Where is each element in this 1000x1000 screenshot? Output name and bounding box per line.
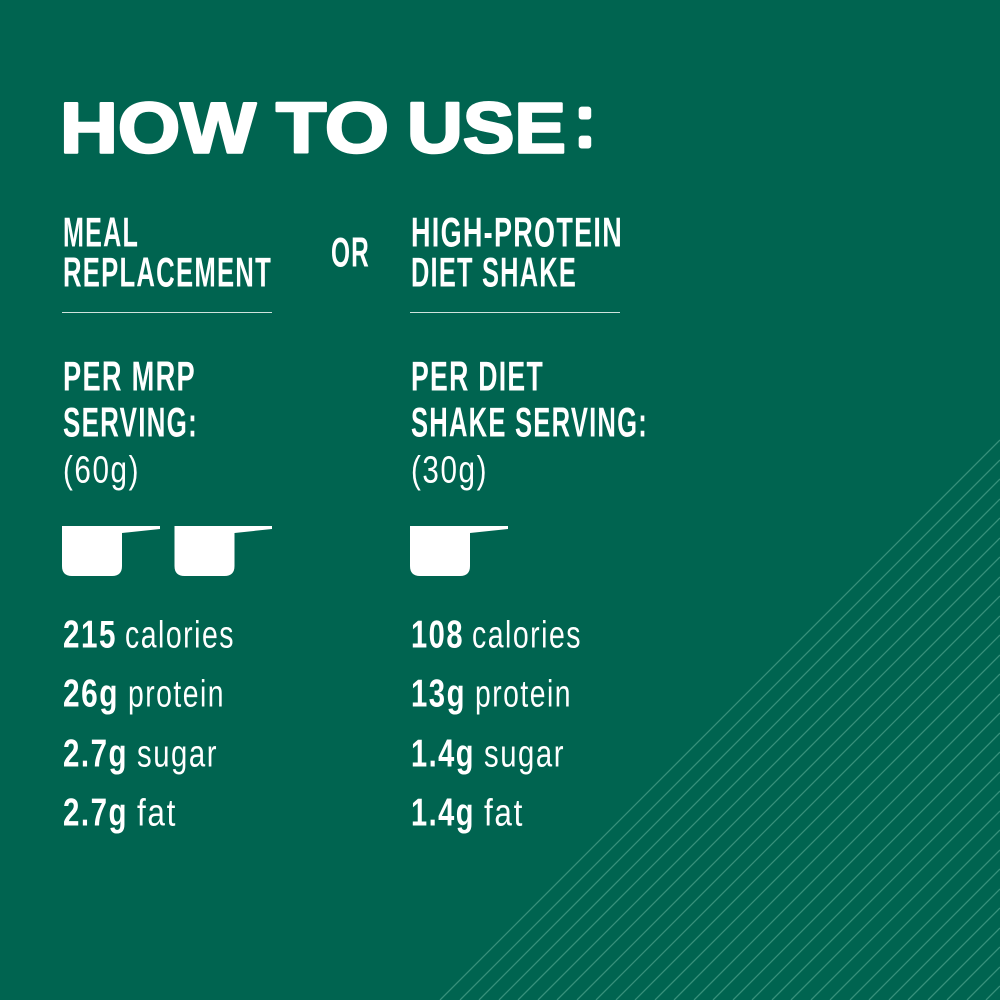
title: USE	[407, 90, 566, 168]
nutrition facts: MRP: 2.7g	[63, 732, 128, 776]
heading: diet shake: DIET SHAKE	[411, 249, 577, 296]
heading: meal replacement: MEAL	[63, 209, 139, 256]
heading: diet shake: HIGH-PROTEIN	[411, 209, 623, 256]
title: HOW	[60, 90, 256, 168]
nutrition facts: diet shake: 13g	[411, 673, 466, 716]
serving size: MRP	[63, 352, 198, 492]
nutrition facts: MRP: calories	[125, 614, 235, 656]
OR label: OR	[331, 229, 370, 276]
heading: meal replacement: REPLACEMENT	[63, 249, 272, 296]
serving size: diet shake: SHAKE SERVING:	[411, 398, 648, 446]
panel: meal replacement	[62, 209, 272, 834]
nutrition facts: MRP	[63, 614, 235, 834]
nutrition facts: MRP: 26g	[63, 673, 119, 716]
title: TO	[276, 90, 389, 168]
nutrition facts: diet shake: 108	[411, 614, 464, 656]
nutrition facts: diet shake: protein	[475, 674, 572, 716]
serving size: diet shake: (30g)	[411, 450, 488, 492]
nutrition facts: MRP: sugar	[137, 734, 218, 776]
nutrition facts: diet shake: sugar	[484, 734, 565, 776]
panel: high-protein diet shake	[410, 209, 648, 834]
title	[60, 84, 594, 168]
serving size: diet shake: PER DIET	[411, 352, 544, 400]
nutrition facts: MRP: 2.7g	[63, 792, 128, 834]
nutrition facts: MRP: 215	[63, 614, 117, 656]
nutrition facts: diet shake: fat	[484, 792, 524, 834]
nutrition facts: diet shake: 1.4g	[411, 732, 475, 776]
nutrition facts: diet shake	[411, 614, 582, 834]
serving size: MRP: PER MRP	[63, 352, 196, 400]
nutrition facts: MRP: protein	[128, 674, 225, 716]
heading: diet shake	[411, 209, 623, 296]
icon: one scoop	[410, 526, 508, 576]
title: :	[576, 84, 594, 160]
nutrition facts: diet shake: 1.4g	[411, 792, 475, 834]
icon: two scoops	[62, 526, 272, 576]
heading: meal replacement	[63, 209, 272, 296]
nutrition facts: diet shake: calories	[472, 614, 582, 656]
serving size: diet shake	[411, 352, 648, 492]
nutrition facts: MRP: fat	[137, 792, 177, 834]
serving size: MRP: SERVING:	[63, 398, 198, 446]
serving size: MRP: (60g)	[63, 450, 140, 492]
